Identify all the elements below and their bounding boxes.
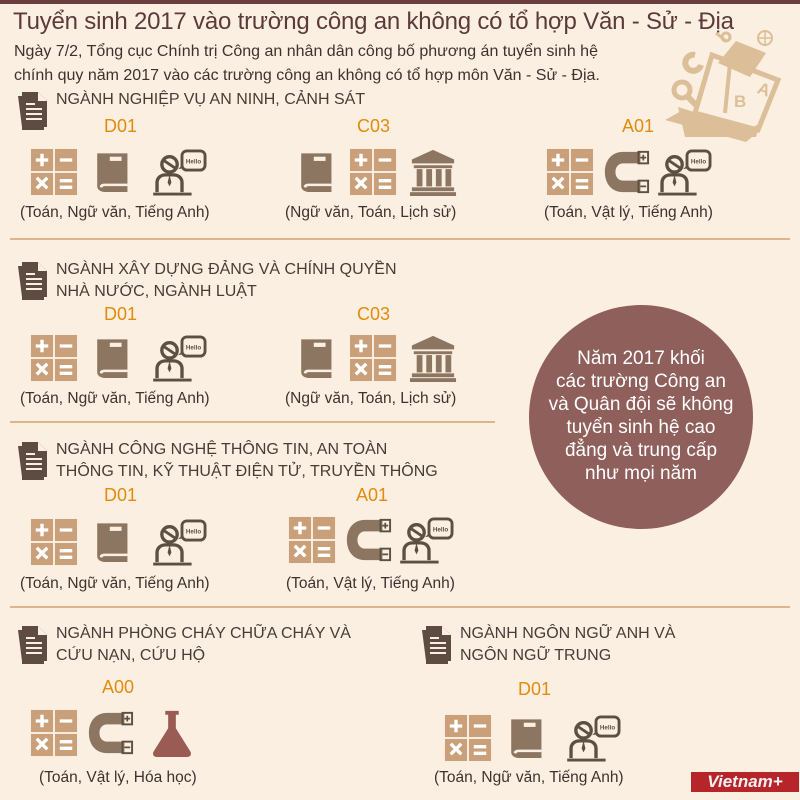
group D01: D01 (104, 485, 137, 505)
intro text (14, 43, 600, 84)
callout circle: như mọi năm (585, 463, 697, 484)
group D01: (Toán, Ngữ văn, Tiếng Anh) (20, 575, 210, 592)
section 2 (18, 260, 456, 407)
section 3 (18, 440, 455, 592)
heading: NGÀNH CÔNG NGHỆ THÔNG TIN, AN TOÀN (56, 441, 387, 458)
icon: document (422, 626, 451, 664)
group A00: A00 (102, 677, 134, 697)
callout circle: các trường Công an (556, 371, 726, 392)
icon: document (18, 92, 47, 130)
screen outline (695, 55, 778, 130)
callout circle: đẳng và trung cấp (565, 440, 717, 461)
heading (56, 624, 351, 664)
heading: NHÀ NƯỚC, NGÀNH LUẬT (56, 283, 257, 300)
section 4 left (18, 624, 351, 786)
heading: THÔNG TIN, KỸ THUẬT ĐIỆN TỬ, TRUYỀN THÔNG (56, 463, 438, 480)
group C03: C03 (357, 304, 390, 324)
group A01: A01 (356, 485, 388, 505)
heading: NGÀNH XÂY DỰNG ĐẢNG VÀ CHÍNH QUYỀN (56, 261, 397, 278)
group A01: (Toán, Vật lý, Tiếng Anh) (286, 575, 455, 592)
logo: Vietnam+: Vietnam+ (707, 772, 783, 791)
group C03: (Ngữ văn, Toán, Lịch sử) (285, 204, 456, 221)
mortarboard (718, 41, 766, 77)
C (685, 55, 701, 71)
icon: document (18, 442, 47, 480)
callout circle (529, 305, 753, 529)
heading (56, 440, 438, 480)
group D01: (Toán, Ngữ văn, Tiếng Anh) (434, 769, 624, 786)
top bar (0, 0, 800, 4)
icon: laptop education (665, 30, 782, 142)
section 4 right (422, 624, 676, 786)
group D01 (434, 679, 624, 786)
group C03 (285, 116, 456, 221)
group D01: D01 (104, 304, 137, 324)
group D01: (Toán, Ngữ văn, Tiếng Anh) (20, 204, 210, 221)
group A01: (Toán, Vật lý, Tiếng Anh) (544, 204, 713, 221)
group A01 (544, 116, 713, 221)
heading: NGÀNH NGÔN NGỮ ANH VÀ (460, 625, 675, 642)
logo: Vietnam+ (691, 772, 799, 792)
group D01: D01 (518, 679, 551, 699)
heading: NGÔN NGỮ TRUNG (460, 647, 611, 664)
group D01: (Toán, Ngữ văn, Tiếng Anh) (20, 390, 210, 407)
icon: laptop education: A (755, 78, 773, 101)
globe (758, 31, 772, 45)
group A01 (286, 485, 455, 592)
magnifier (674, 82, 690, 98)
intro text: chính quy năm 2017 vào các trường công an không có tổ hợp môn Văn - Sử - Địa. (14, 67, 600, 84)
group D01 (20, 116, 210, 221)
group D01 (20, 485, 210, 592)
icon: document (18, 626, 47, 664)
heading (460, 624, 676, 664)
heading (56, 260, 397, 300)
section 1 (18, 90, 713, 221)
icon: document (18, 262, 47, 300)
group A00: (Toán, Vật lý, Hóa học) (39, 769, 197, 786)
group C03: (Ngữ văn, Toán, Lịch sử) (285, 390, 456, 407)
group A00 (31, 677, 197, 786)
group C03 (285, 304, 456, 407)
group A01: A01 (622, 116, 654, 136)
heading: CỨU NẠN, CỨU HỘ (56, 647, 205, 664)
callout circle: và Quân đội sẽ không (549, 394, 733, 415)
heading: NGÀNH PHÒNG CHÁY CHỮA CHÁY VÀ (56, 625, 351, 642)
base (678, 107, 760, 137)
intro text: Ngày 7/2, Tổng cục Chính trị Công an nhân dân công bố phương án tuyển sinh hệ (14, 43, 598, 60)
heading: NGÀNH NGHIỆP VỤ AN NINH, CẢNH SÁT (56, 91, 365, 108)
group C03: C03 (357, 116, 390, 136)
group D01 (20, 304, 210, 407)
icon: laptop education: B (734, 92, 746, 111)
callout circle: tuyển sinh hệ cao (567, 417, 715, 438)
group D01: D01 (104, 116, 137, 136)
callout circle: Năm 2017 khối (577, 348, 705, 369)
scissors-ish (722, 33, 730, 41)
title: Tuyển sinh 2017 vào trường công an không có tổ hợp Văn - Sử - Địa (13, 8, 734, 35)
